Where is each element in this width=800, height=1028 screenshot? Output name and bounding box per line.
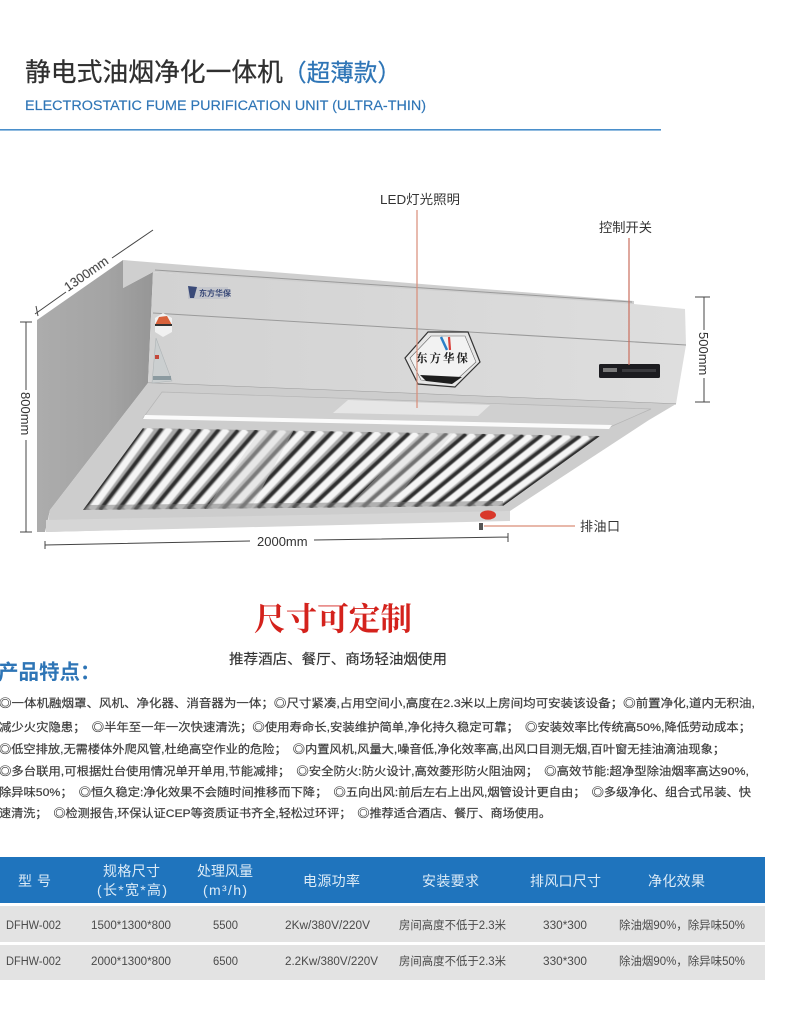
table row 2: 330*300	[543, 956, 587, 968]
features text block: 除异味50%； ◎恒久稳定:净化效果不会随时间推移而下降； ◎五向出风:前后左右上出风,烟管设计更自由； ◎多级净化、组合式吊装、快	[0, 785, 751, 799]
callout: oil drain	[484, 519, 620, 534]
table row 1: 房间高度不低于2.3米	[399, 918, 506, 932]
features heading: 产品特点：	[0, 661, 100, 684]
table header: 净化效果	[648, 873, 705, 889]
hexagon badge	[405, 332, 480, 387]
callout: LED light: LED灯光照明	[380, 192, 460, 207]
table row 2: 2000*1300*800	[91, 956, 171, 968]
table header: 型 号	[18, 873, 51, 889]
recommendation line: 推荐酒店、餐厅、商场轻油烟使用	[229, 651, 447, 667]
hood front panel	[148, 272, 686, 404]
dimension: 2000mm	[45, 533, 508, 549]
title: （超薄款）	[283, 60, 401, 87]
callout: control switch: 控制开关	[599, 220, 652, 235]
hood lower slanted panel	[46, 383, 676, 532]
hexagon badge: 东方华保	[416, 350, 468, 366]
dimension: 2000mm: 2000mm	[257, 534, 308, 549]
table header: 电源功率	[303, 873, 360, 889]
table row 1	[0, 906, 765, 942]
table row 2: 除油烟90%，除异味50%	[619, 954, 745, 968]
features text block: ◎多台联用,可根据灶台使用情况单开单用,节能减排； ◎安全防火:防火设计,高效菱形防火阻油网； ◎高效节能:超净型除油烟率高达90%,	[0, 764, 749, 778]
table row 2: 房间高度不低于2.3米	[399, 954, 506, 968]
table row 1: DFHW-002	[6, 920, 61, 932]
table header: 规格尺寸	[103, 863, 160, 879]
table header: (m³/h)	[203, 882, 247, 898]
title: 静电式油烟净化一体机	[25, 58, 283, 87]
table row 2	[0, 945, 765, 980]
table header: (长*宽*高)	[97, 882, 167, 898]
product illustration: range hood	[37, 260, 686, 532]
table row 1: 330*300	[543, 920, 587, 932]
features text block: 减少火灾隐患； ◎半年至一年一次快速清洗；◎使用寿命长,安装维护简单,净化持久稳定可靠； ◎安装效率比传统高50%,降低劳动成本；	[0, 720, 751, 734]
table row 1: 1500*1300*800	[91, 920, 171, 932]
customizable size slogan: 尺寸可定制	[254, 594, 412, 640]
brand logo plate: 东方华保	[199, 288, 231, 298]
spec table	[0, 857, 765, 980]
hood side panel	[37, 260, 153, 532]
white light bar	[143, 415, 612, 429]
features text block: ◎一体机融烟罩、风机、净化器、消音器为一体；◎尺寸紧凑,占用空间小,高度在2.3米以上房间均可安装该设备；◎前置净化,道内无积油,	[0, 696, 755, 710]
brand logo plate	[188, 286, 231, 299]
dimension: 1300mm: 1300mm	[61, 253, 111, 294]
dimension: 500mm	[695, 297, 711, 402]
table row 2: 2.2Kw/380V/220V	[285, 956, 378, 968]
hood top strip	[123, 260, 634, 307]
table row 2: 6500	[213, 956, 238, 968]
title	[25, 58, 401, 87]
dimension: 800mm: 800mm	[18, 392, 33, 435]
oil outlet	[479, 510, 496, 530]
features text block	[0, 696, 755, 820]
table header: 安装要求	[422, 873, 479, 889]
control panel	[599, 364, 660, 378]
warning stickers	[152, 313, 172, 383]
dimension: 500mm: 500mm	[696, 332, 711, 375]
table header: 处理风量	[197, 863, 253, 879]
features text block: ◎低空排放,无需楼体外爬风管,杜绝高空作业的危险； ◎内置风机,风量大,噪音低,净化效率高,出风口目测无烟,百叶窗无挂油滴油现象；	[0, 742, 725, 756]
table row 2: DFHW-002	[6, 956, 61, 968]
grease filter slats	[83, 428, 600, 510]
table row 1: 2Kw/380V/220V	[285, 920, 370, 932]
table header: 排风口尺寸	[530, 873, 601, 889]
subtitle: ELECTROSTATIC FUME PURIFICATION UNIT (ULTRA-THIN)	[25, 98, 426, 113]
features text block: 速清洗； ◎检测报告,环保认证CEP等资质证书齐全,轻松过环评； ◎推荐适合酒店、餐厅、商场使用。	[0, 806, 551, 820]
table header	[0, 857, 765, 903]
callout: oil drain: 排油口	[580, 519, 620, 534]
table row 1: 除油烟90%，除异味50%	[619, 918, 745, 932]
LED light panel	[333, 400, 490, 416]
table row 1: 5500	[213, 920, 238, 932]
dimension: 1300mm	[35, 230, 153, 316]
dimension: 800mm	[18, 322, 33, 532]
